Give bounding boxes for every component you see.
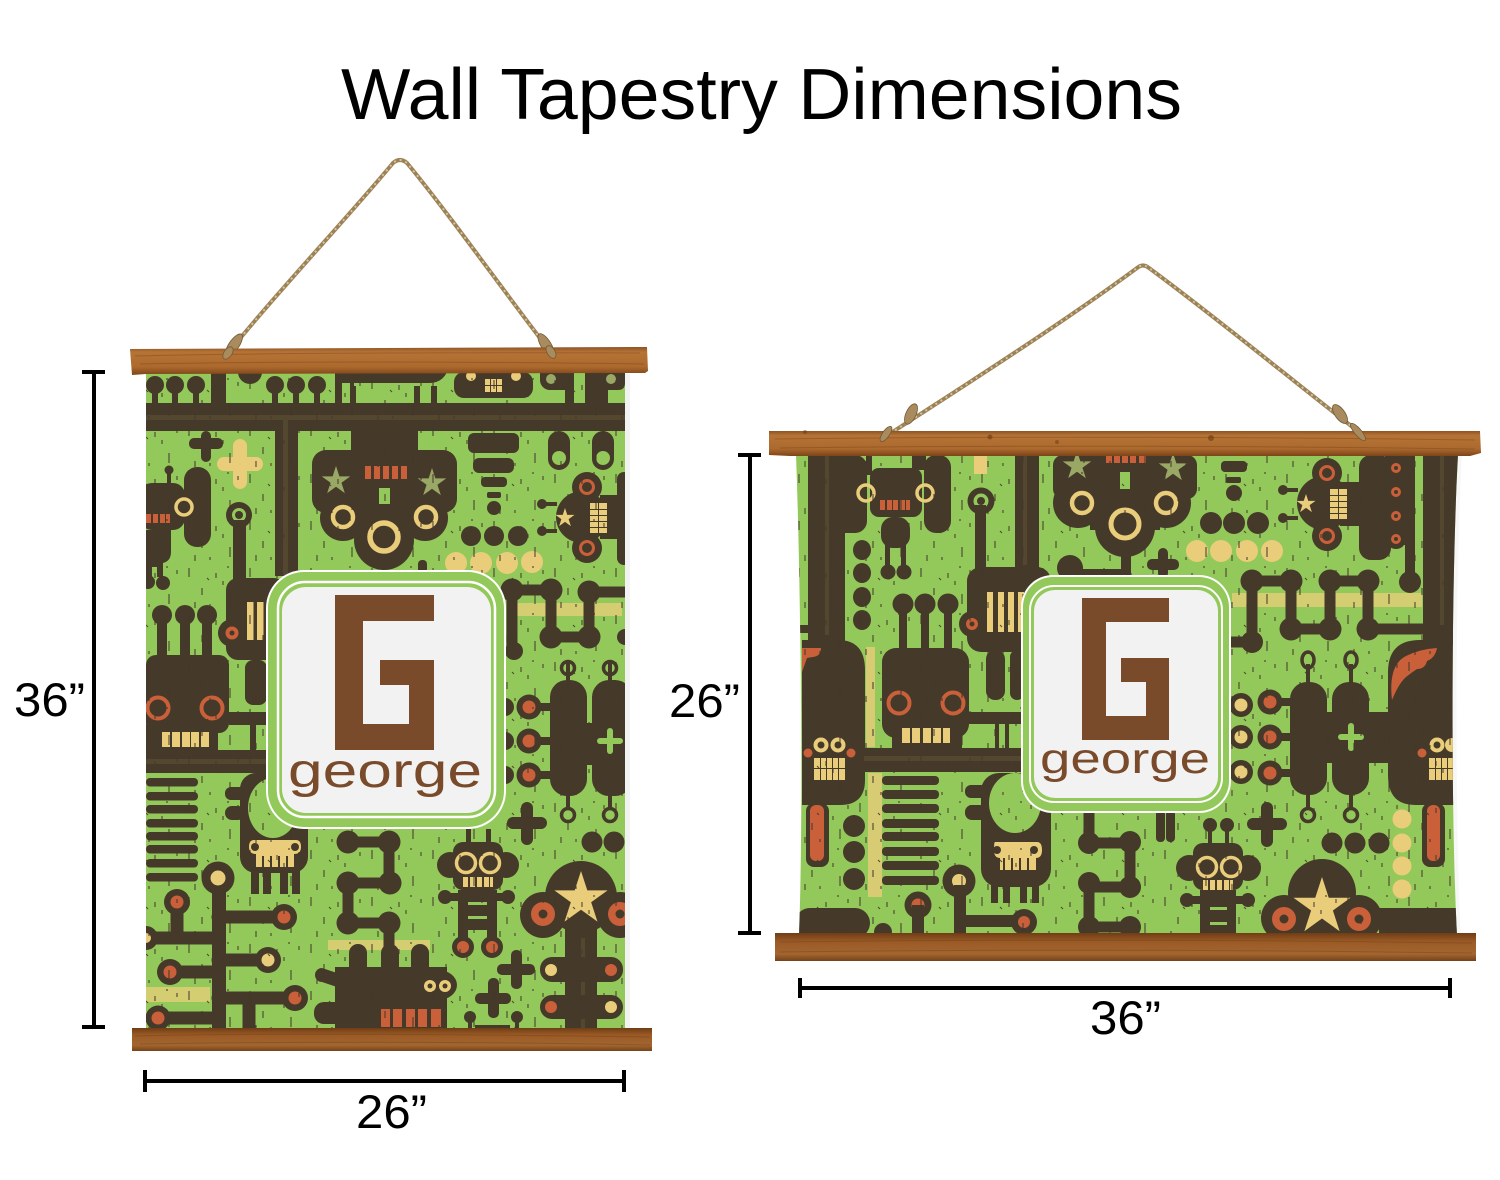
dimension: landscape width	[800, 978, 1450, 1044]
left block robot with tongue	[795, 640, 870, 938]
dimension: portrait width	[145, 1070, 624, 1138]
skeleton robot	[437, 829, 519, 958]
bone connector	[500, 578, 633, 660]
title: Wall Tapestry Dimensions	[341, 55, 1182, 135]
hanging rope: portrait	[222, 160, 557, 359]
ringed machine	[959, 455, 1051, 700]
dimension: portrait height: 36”	[14, 673, 85, 726]
E shaped connector	[336, 830, 402, 947]
right block robot with wing	[1379, 640, 1464, 938]
skull creature	[965, 773, 1051, 903]
letter G monogram	[335, 595, 434, 750]
skull robot left	[146, 605, 271, 773]
bottom wooden rod: portrait	[132, 1028, 652, 1051]
skeleton robot	[1176, 818, 1261, 935]
star robot face	[1053, 451, 1197, 581]
circuit tree	[134, 862, 308, 1030]
dinosaur creature	[314, 944, 457, 1037]
skull robot	[860, 594, 1030, 772]
circuit nodes bottom left	[874, 864, 1037, 933]
brand name george: george	[288, 745, 482, 798]
dimension: portrait height	[14, 371, 105, 1028]
star bug robot	[537, 472, 631, 565]
bottom wooden rod: landscape	[775, 933, 1476, 961]
tapestry artwork: portrait	[134, 360, 643, 1037]
rungs	[882, 776, 939, 885]
top wooden rod: landscape	[769, 421, 1481, 456]
top wooden rod: portrait	[130, 344, 648, 375]
striped rungs	[146, 778, 198, 882]
letter G monogram	[1082, 598, 1169, 740]
ringed antenna machine	[218, 502, 286, 705]
E connector	[1078, 810, 1175, 938]
tapestry artwork: landscape	[790, 451, 1470, 941]
plus icons top left	[189, 431, 263, 489]
U pipes top right	[548, 431, 614, 470]
star bug robot and ring column	[1278, 455, 1463, 645]
left robot	[140, 466, 211, 590]
star robot face	[312, 431, 457, 576]
dimension: landscape height	[669, 454, 761, 934]
panel: landscape tapestry 36 by 26	[769, 266, 1481, 961]
panel: portrait tapestry 26 by 36	[130, 160, 652, 1051]
logo badge: portrait	[266, 570, 506, 829]
star car	[1261, 859, 1380, 933]
brand name george: george	[1040, 735, 1210, 783]
dimension: landscape width: 36”	[1090, 991, 1161, 1044]
top rail and pipes	[146, 360, 625, 576]
dimension: landscape height: 26”	[669, 674, 740, 727]
star tree	[520, 861, 625, 1028]
dimension: portrait width: 26”	[356, 1085, 427, 1138]
skull creature bottom left	[225, 773, 308, 894]
left pipes and robot	[798, 455, 951, 645]
logo badge: landscape	[1021, 575, 1231, 813]
hanging rope: landscape	[880, 266, 1372, 442]
plus and dots	[1247, 802, 1412, 898]
bone connector	[1231, 570, 1425, 653]
twin body robot with green plus	[506, 660, 625, 824]
stacked pills	[445, 433, 543, 574]
twin body robot	[1229, 652, 1400, 822]
plus and dots right	[464, 802, 624, 1030]
stacked pills and dots	[1147, 461, 1283, 578]
